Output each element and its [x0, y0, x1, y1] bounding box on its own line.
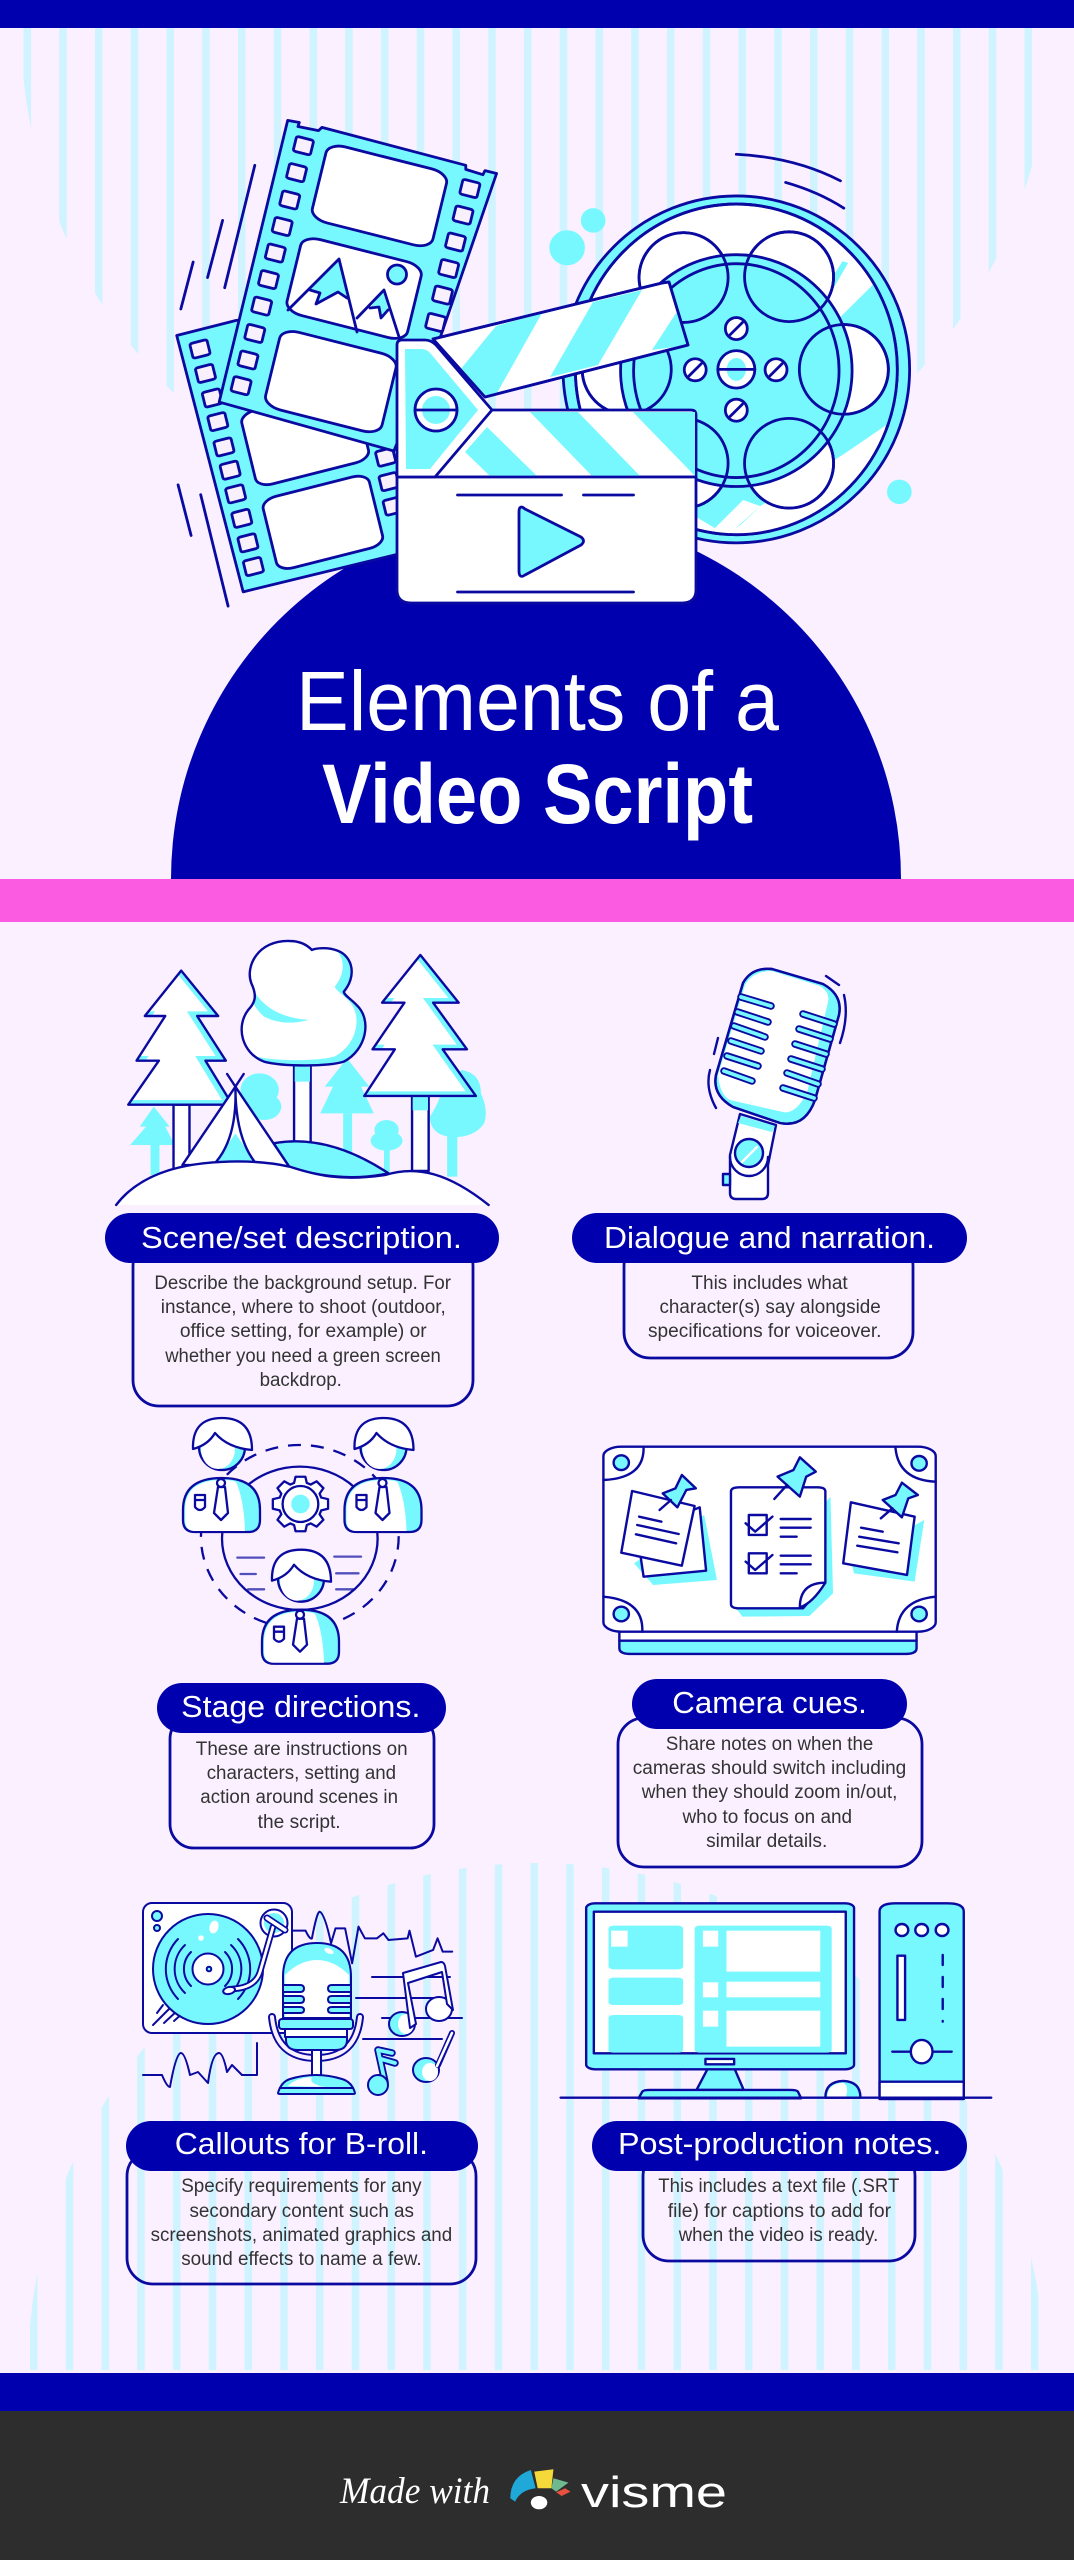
front film strip	[219, 120, 497, 451]
hill	[274, 1141, 388, 1177]
card: Callouts for B-roll	[126, 2121, 478, 2284]
tower	[880, 1903, 964, 2099]
card: Stage directions: Stage directions.	[181, 1689, 420, 1724]
gear	[273, 1477, 328, 1531]
illustration: team of three people with gear	[183, 1418, 422, 1664]
navy semicircle	[171, 514, 901, 879]
card: Scene/set description: backdrop.	[260, 1370, 342, 1391]
turntable	[143, 1903, 292, 2033]
card: Callouts for B-roll: screenshots, animated graphics and	[151, 2225, 452, 2246]
studio microphone	[272, 1943, 360, 2094]
film reel	[563, 196, 918, 543]
illustration: desktop computer	[561, 1903, 991, 2099]
card: Scene/set description	[105, 1213, 499, 1406]
background cyan trees	[130, 1058, 486, 1177]
middle checklist	[731, 1457, 833, 1617]
footer band	[0, 2411, 1074, 2560]
card: Stage directions: These are instructions on	[196, 1739, 408, 1760]
card: Scene/set description: Scene/set description.	[141, 1220, 462, 1255]
card: Dialogue and narration: specifications for voiceover.	[648, 1321, 882, 1342]
hinge	[397, 340, 492, 477]
card: Dialogue and narration: This includes what	[691, 1273, 848, 1294]
card: Camera cues: cameras should switch including	[633, 1758, 906, 1779]
illustration: turntable, microphone and music notes	[143, 1903, 462, 2095]
card: Post-production notes: Post-production notes.	[618, 2126, 941, 2161]
card: Camera cues: similar details.	[706, 1831, 827, 1852]
clapper arm	[433, 282, 690, 402]
card: Scene/set description: Describe the background setup. For	[154, 1273, 452, 1294]
card: Stage directions	[157, 1683, 446, 1848]
made with text: Made with	[339, 2471, 490, 2512]
card: Stage directions: characters, setting and	[207, 1763, 396, 1784]
card: Callouts for B-roll: secondary content such as	[190, 2201, 414, 2222]
card: Dialogue and narration	[572, 1213, 967, 1358]
card: Scene/set description: whether you need a green screen	[164, 1346, 441, 1367]
mouse	[825, 2081, 860, 2098]
card: Scene/set description: office setting, for example) or	[180, 1321, 427, 1342]
card: Stage directions: the script.	[258, 1812, 341, 1833]
illustration: camp scene	[116, 936, 489, 1205]
sound arcs	[708, 976, 846, 1108]
mountains picture in film frame	[288, 259, 406, 340]
tent	[182, 1074, 290, 1167]
lower striped bar	[430, 410, 696, 477]
hero illustration: film reel and film strips	[177, 120, 918, 606]
top navy bar	[0, 0, 1074, 28]
card: Scene/set description: instance, where to shoot (outdoor,	[161, 1297, 446, 1318]
mic head	[715, 969, 840, 1124]
music notes	[368, 1962, 453, 2095]
round tree	[233, 936, 365, 1065]
play button	[519, 507, 584, 576]
card: Camera cues: Share notes on when the	[666, 1734, 873, 1755]
bottom navy bar	[0, 2373, 1074, 2411]
card: Dialogue and narration: character(s) say alongside	[660, 1297, 881, 1318]
ground	[116, 1161, 489, 1205]
waveforms	[143, 1912, 452, 2087]
clapper body	[397, 477, 696, 603]
visme wordmark: visme	[581, 2468, 727, 2517]
pink band	[0, 879, 1074, 922]
card: Camera cues: Camera cues.	[672, 1685, 867, 1720]
card: Camera cues: who to focus on and	[682, 1807, 852, 1828]
right pine	[354, 950, 476, 1096]
card: Camera cues: when they should zoom in/out,	[641, 1782, 897, 1803]
grille slits	[724, 997, 834, 1098]
card: Post-production notes	[592, 2121, 967, 2261]
card: Dialogue and narration: Dialogue and narration.	[604, 1220, 935, 1255]
title: Video Script	[322, 747, 753, 841]
clapperboard	[397, 282, 696, 603]
cyan dots	[549, 208, 912, 504]
card: Camera cues	[618, 1679, 922, 1867]
back film strip	[177, 310, 411, 592]
card: Post-production notes: when the video is ready.	[678, 2225, 878, 2246]
card: Stage directions: action around scenes in	[200, 1787, 398, 1808]
card: Callouts for B-roll: Specify requirements for any	[181, 2176, 422, 2197]
title: Elements of a	[296, 654, 779, 748]
right note	[843, 1483, 924, 1582]
motion lines	[178, 154, 844, 606]
illustration: microphone	[708, 969, 846, 1199]
mic knob	[735, 1139, 763, 1167]
trunks	[174, 1066, 429, 1171]
card: Callouts for B-roll: Callouts for B-roll.	[175, 2126, 428, 2161]
card: Post-production notes: file) for captions to add for	[668, 2201, 892, 2222]
left pine	[127, 969, 228, 1106]
left note	[621, 1475, 717, 1585]
title	[296, 654, 779, 841]
bottom stripes background	[0, 1860, 1074, 2370]
card: Callouts for B-roll: sound effects to name a few.	[181, 2249, 422, 2270]
visme logo mark	[510, 2469, 571, 2509]
staff lines	[356, 1977, 462, 2039]
card: Post-production notes: This includes a text file (.SRT	[658, 2176, 900, 2197]
illustration: notice board	[603, 1447, 936, 1654]
top stripes background	[24, 28, 1032, 409]
mic neck	[730, 1114, 776, 1199]
